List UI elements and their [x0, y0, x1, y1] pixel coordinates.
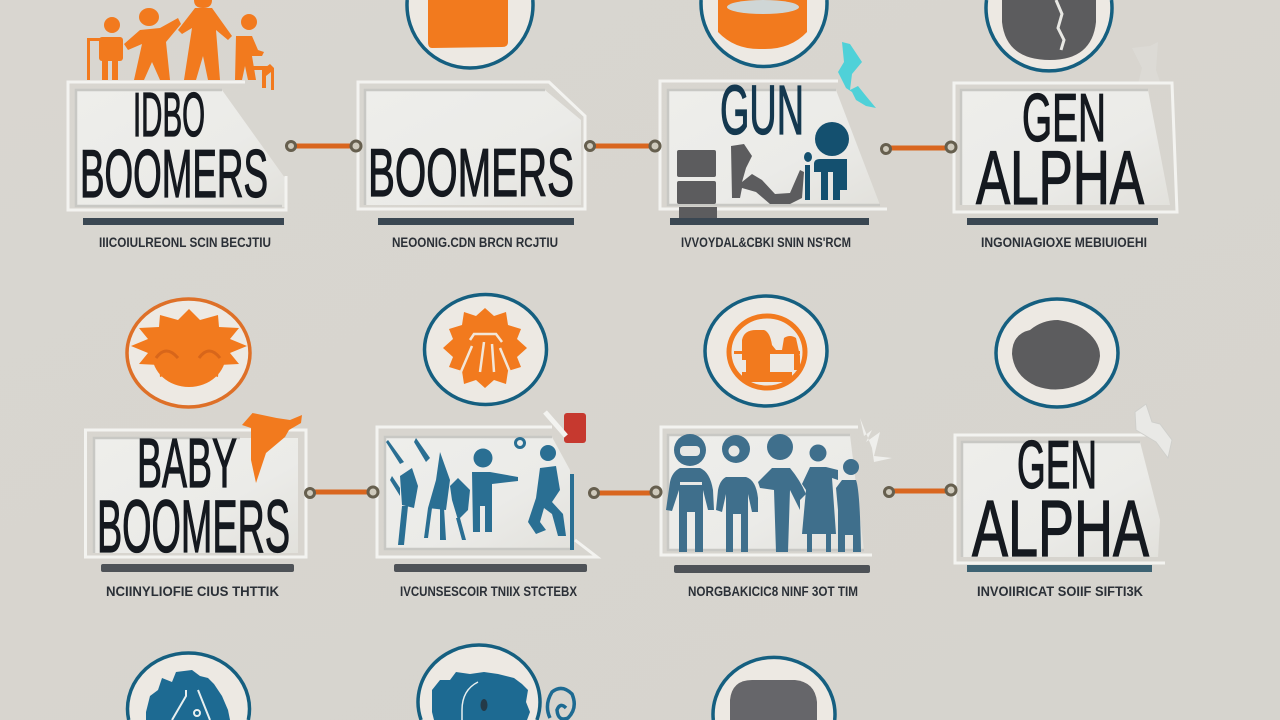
caption: IVCUNSESCOIR TNIIX STCTEBX — [400, 584, 577, 599]
heading: BOOMERS — [80, 136, 268, 212]
panel: card 5 Baby Boomers — [86, 413, 306, 599]
heading: GEN — [1022, 80, 1106, 156]
icon: orange family — [87, 0, 274, 90]
card frame — [358, 82, 585, 209]
connector 4 — [306, 487, 378, 498]
heading: GUN — [720, 71, 804, 149]
connector 6 — [884, 485, 956, 496]
heading — [80, 81, 268, 212]
heading: BOOMERS — [97, 485, 290, 568]
heading: GEN — [1017, 427, 1097, 503]
heading: BOOMERS — [368, 135, 574, 211]
heading: ALPHA — [976, 136, 1144, 221]
bar — [670, 218, 869, 225]
panel: card 1 IDBO Boomers — [68, 0, 286, 250]
card frame — [660, 81, 887, 209]
connector 5 — [590, 487, 661, 498]
card frame — [955, 435, 1165, 563]
panel: card 6 active figures — [377, 412, 597, 599]
icon: orange circle with figures — [705, 296, 827, 406]
heading — [972, 427, 1149, 573]
icon: teal blob circle with spiral, bottom middle — [418, 645, 574, 720]
icon: circle with orange cylinder — [701, 0, 827, 67]
icon: gray stack and figure — [677, 144, 804, 224]
icon: orange sun — [127, 299, 250, 407]
icon: white splash — [860, 418, 892, 462]
card frame — [86, 430, 306, 557]
bar — [967, 565, 1152, 572]
caption: INVOIIRICAT SOIIF SIFTI3K — [977, 584, 1143, 599]
bar — [101, 564, 294, 572]
card frame — [954, 83, 1177, 212]
caption: IVVOYDAL&CBKI SNIN NS'RCM — [681, 235, 851, 250]
connector 2 — [586, 141, 660, 151]
bar — [83, 218, 284, 225]
panel: card 3 Gun — [660, 42, 887, 250]
card frame — [661, 427, 872, 555]
icon: gray circle — [996, 299, 1118, 407]
bar — [378, 218, 574, 225]
bar — [674, 565, 870, 573]
connector 1 — [286, 141, 361, 151]
caption: INGONIAGIOXE MEBIUIOEHI — [981, 235, 1147, 250]
decoration: faint white splash — [1132, 42, 1160, 84]
panel: card 7 family group — [661, 418, 892, 599]
icon: teal dancing figures — [386, 438, 574, 550]
caption: IIICOIULREONL SCIN BECJTIU — [99, 235, 271, 250]
caption: NEOONIG.CDN BRCN RCJTIU — [392, 235, 558, 250]
icon: gray rounded square circle, bottom right — [713, 657, 835, 720]
icon: family figures — [666, 434, 861, 552]
bar — [394, 564, 587, 572]
heading: BABY — [137, 424, 237, 502]
heading — [976, 80, 1144, 221]
caption: NCIINYLIOFIE CIUS THTTIK — [106, 584, 279, 599]
heading — [97, 424, 290, 568]
bar — [967, 218, 1158, 225]
card frame — [377, 427, 597, 557]
panel: card 4 Gen Alpha — [954, 42, 1177, 250]
caption: NORGBAKICIC8 NINF 3OT TIM — [688, 584, 858, 599]
connector 3 — [882, 142, 956, 154]
icon: orange flag — [242, 413, 302, 483]
panel: card 8 Gen Alpha — [955, 404, 1172, 599]
icon: circle with orange square — [407, 0, 533, 68]
icon: red square — [545, 412, 586, 443]
heading: ALPHA — [972, 484, 1149, 573]
icon: navy person — [804, 122, 849, 200]
icon: white splash — [1135, 404, 1172, 458]
panel: card 2 Boomers — [358, 82, 585, 250]
card frame — [68, 82, 286, 210]
heading: IDBO — [133, 81, 205, 150]
icon: circle with gray shape — [986, 0, 1112, 71]
icon: cyan splash — [838, 42, 876, 108]
icon: orange burst — [424, 294, 546, 404]
icon: teal blob circle, bottom left — [128, 653, 249, 720]
